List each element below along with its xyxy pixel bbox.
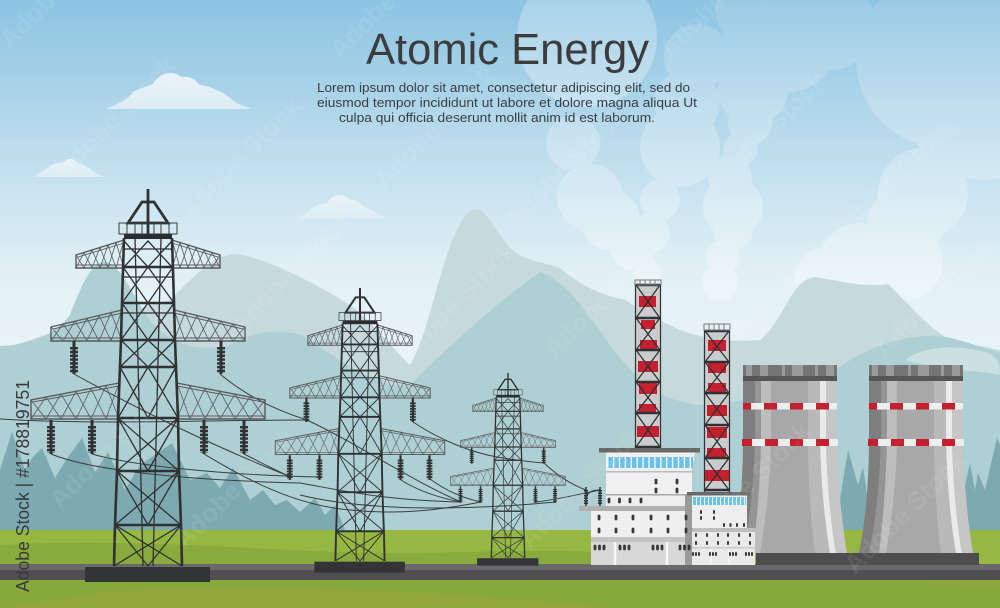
stock watermarks: Adobe Stock (698, 65, 832, 199)
smoke wisp over the mountains (905, 347, 1000, 375)
stock watermarks: Adobe Stock (683, 415, 817, 549)
smoke plumes (517, 0, 1000, 308)
upper grass field (0, 530, 1000, 566)
cooling tower base (756, 553, 979, 565)
stock watermarks: Adobe Stock (168, 420, 302, 554)
chimney 1 (635, 280, 661, 448)
building insulators (586, 487, 600, 506)
stock watermarks: Adobe Stock (838, 445, 972, 579)
stock watermarks: Adobe Stock (388, 235, 522, 369)
cloud 1 (105, 73, 252, 109)
cloud 3 (294, 195, 391, 219)
road (0, 564, 1000, 580)
middle mountains (0, 262, 1000, 530)
stock watermarks: Adobe Stock (173, 90, 307, 224)
tree line (0, 432, 1000, 530)
chimney 2 (704, 324, 730, 492)
stock watermarks: Adobe Stock (538, 230, 672, 364)
stock watermarks: Adobe Stock (868, 230, 1000, 364)
distant mountains (0, 209, 1000, 530)
pylon 1 (31, 189, 265, 582)
lower grass field (0, 580, 1000, 608)
main reactor building (579, 448, 700, 565)
stock watermarks: Adobe Stock (498, 100, 632, 234)
stock watermarks: Adobe Stock (43, 380, 177, 514)
pylon 3 (451, 373, 565, 566)
description text: Lorem ipsum dolor sit amet, consectetur adipiscing elit, sed do (317, 80, 690, 95)
title: Atomic Energy (366, 25, 649, 74)
stock watermarks: Adobe Stock (223, 205, 357, 339)
pylon 2 (275, 288, 445, 573)
smoke plume behind the title (517, 0, 657, 107)
stock watermarks: Adobe Stock (723, 210, 857, 344)
stock watermarks: Adobe Stock (368, 60, 502, 194)
sky background (0, 0, 1000, 420)
cloud 2 (33, 159, 105, 177)
description text (317, 80, 697, 125)
power lines (0, 374, 600, 512)
stock watermarks: Adobe Stock (48, 50, 182, 184)
cooling tower 1 (733, 365, 847, 553)
stock id label: Adobe Stock | #178819751 (13, 380, 33, 592)
secondary building (687, 492, 758, 565)
stock watermarks: Adobe Stock (828, 110, 962, 244)
cooling tower 2 (859, 365, 973, 553)
description text: culpa qui officia deserunt mollit anim id est laborum. (339, 110, 655, 125)
description text: eiusmod tempor incididunt ut labore et dolore magna aliqua Ut (317, 95, 697, 110)
stock watermarks: Adobe Stock (513, 420, 647, 554)
